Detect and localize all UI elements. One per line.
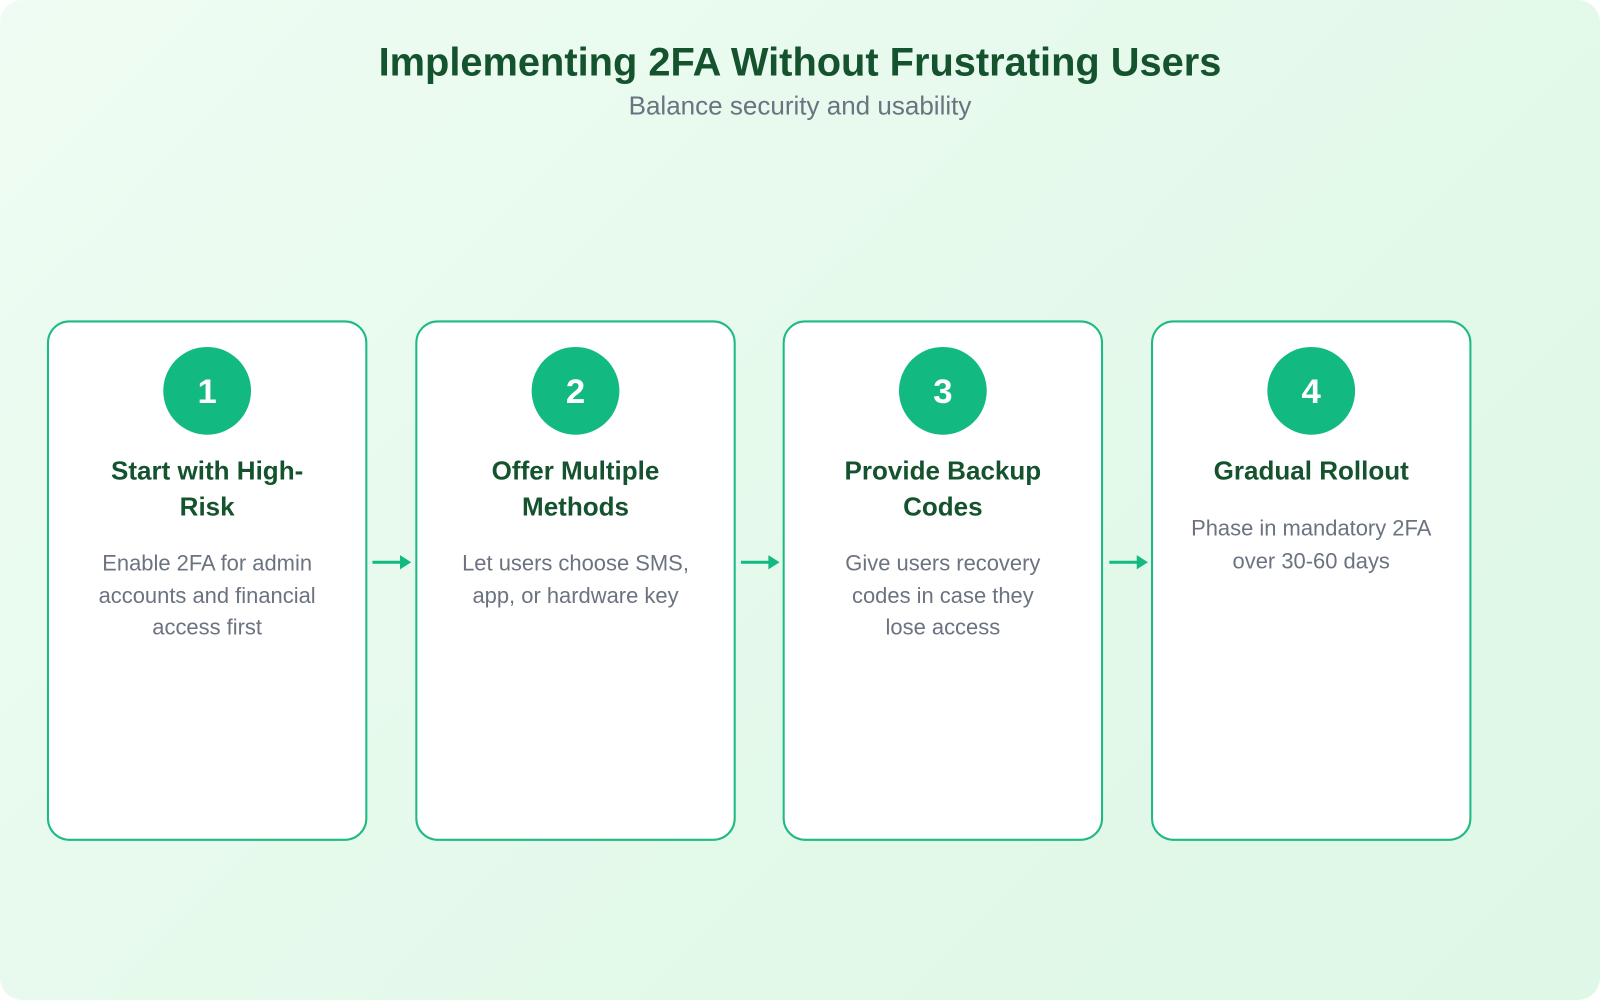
text: step 1: access first [152,615,262,640]
panel: step 4 [1151,320,1471,841]
text: step 1 [99,551,316,640]
arrow 2 [740,555,780,570]
text: step 2: app, or hardware key [472,583,679,608]
icon: number 4: 4 [1302,372,1321,411]
title: Implementing 2FA Without Frustrating Users [379,41,1221,85]
icon: number 3 [899,347,987,435]
heading: step 1: Risk [180,493,235,521]
text: step 4: Phase in mandatory 2FA [1191,516,1431,541]
heading: step 2: Methods [522,493,629,521]
text: step 4: over 30-60 days [1233,548,1390,573]
heading: step 1: Start with High- [111,457,303,486]
icon: number 3: 3 [933,372,953,411]
panel: step 1 [47,320,367,841]
icon: number 2: 2 [566,372,585,411]
heading: step 2 [492,457,659,521]
text: step 2: Let users choose SMS, [462,551,689,576]
text: step 4 [1191,516,1432,573]
panel: step 3 [783,320,1103,841]
arrow 3 [1109,555,1148,570]
text: step 3: codes in case they [852,583,1034,608]
text: step 1: accounts and financial [99,583,316,608]
text: step 3 [845,551,1040,640]
heading: step 2: Offer Multiple [492,457,659,486]
panel: step 2 [415,320,736,841]
heading: step 3: Provide Backup [845,457,1041,486]
heading: step 3: Codes [903,493,983,521]
icon: number 1: 1 [197,372,217,411]
icon: number 1 [163,347,251,435]
heading: step 3 [845,457,1041,521]
heading: step 1 [111,457,303,521]
text: step 2 [462,551,689,608]
heading: step 4: Gradual Rollout [1214,457,1409,486]
text: step 3: Give users recovery [845,551,1040,576]
icon: number 4 [1267,347,1355,435]
subtitle: Balance security and usability [629,92,971,120]
text: step 1: Enable 2FA for admin [102,551,312,576]
arrow 1 [372,555,412,570]
icon: number 2 [532,347,619,435]
text: step 3: lose access [886,615,1000,640]
